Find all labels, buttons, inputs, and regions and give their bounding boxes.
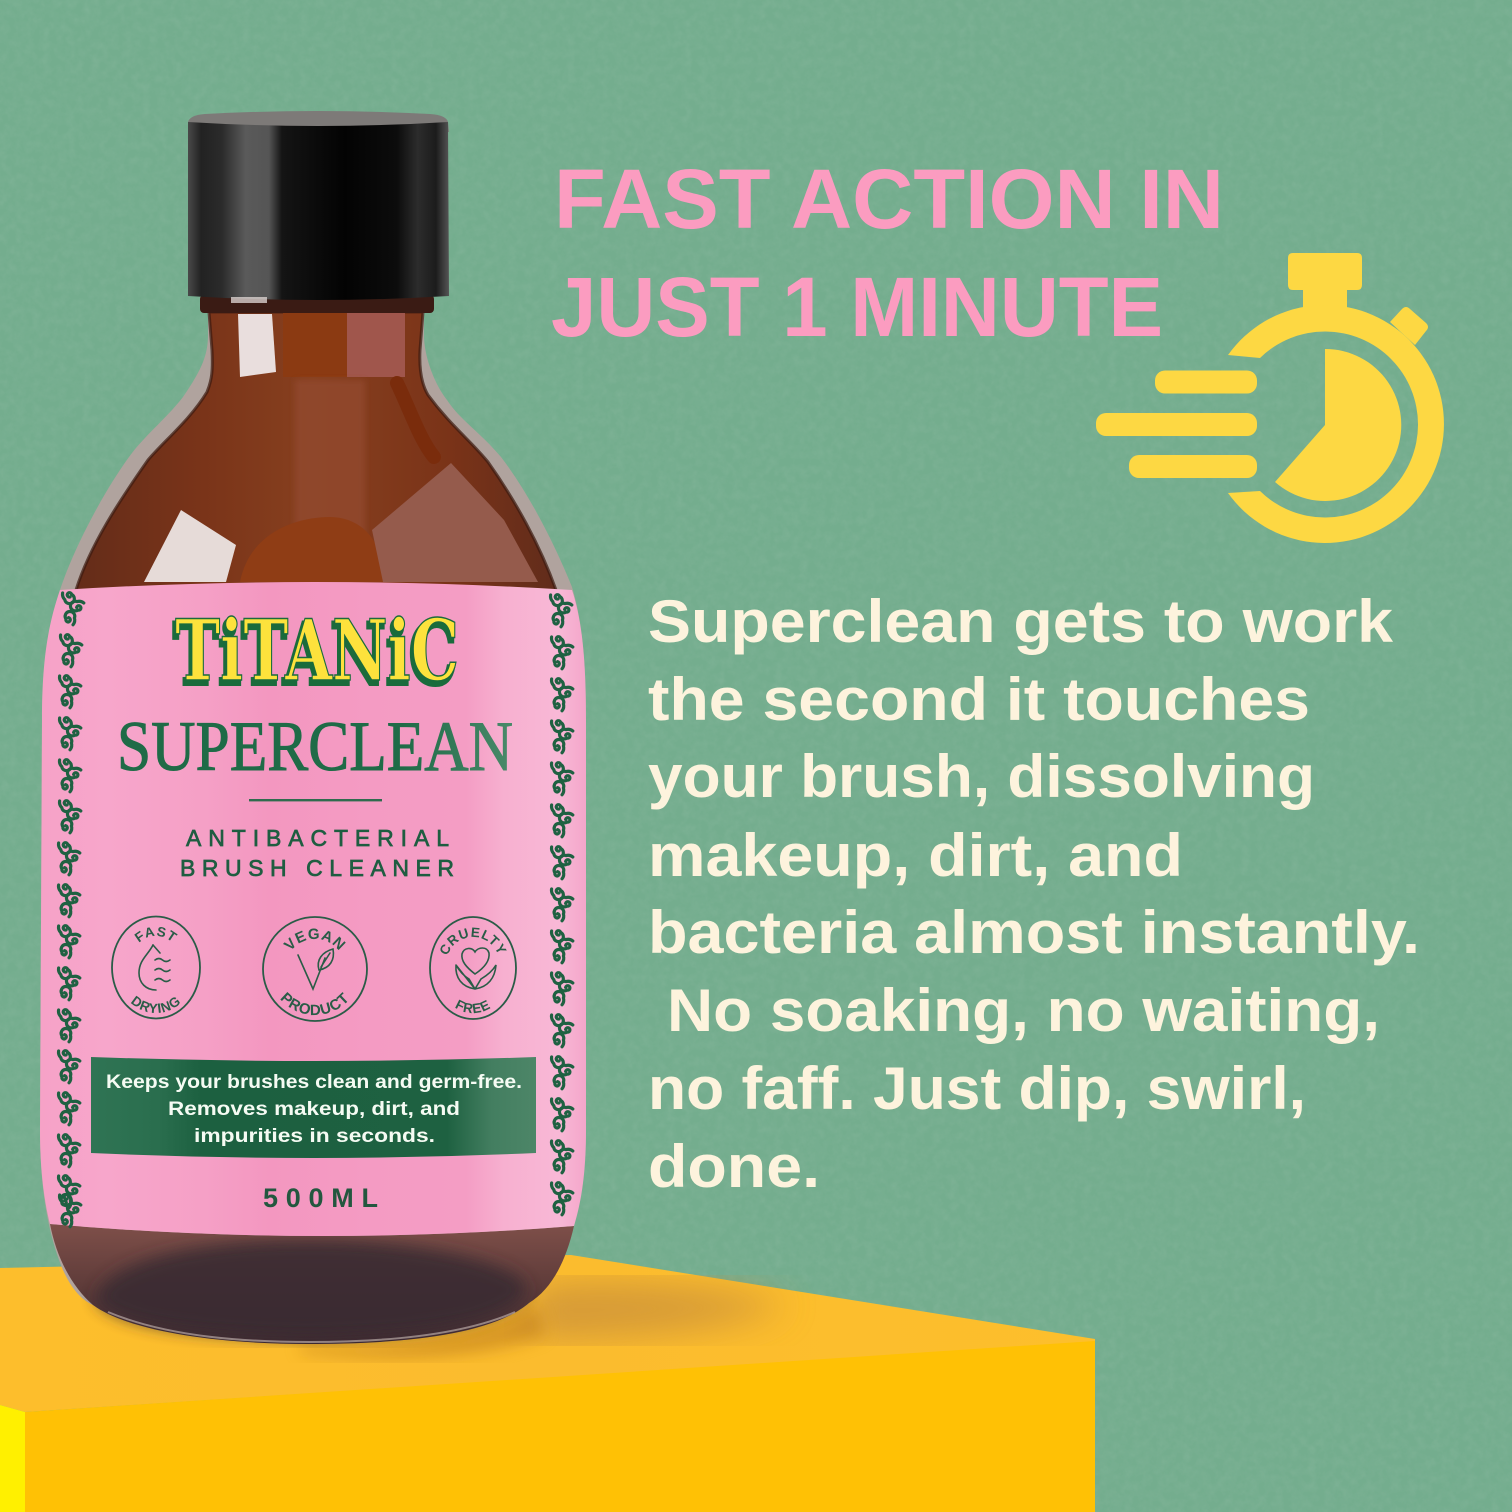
neck right highlight (347, 313, 405, 377)
badge: vegan product: PRODUCT (280, 992, 348, 1016)
badge: cruelty free (429, 916, 517, 1020)
stopwatch wedge (1275, 349, 1401, 501)
subtitle (180, 825, 454, 881)
neck amber core (283, 313, 347, 377)
body copy: bacteria almost instantly. (648, 899, 1420, 966)
stopwatch ring (1228, 305, 1444, 543)
body copy: No soaking, no waiting, (667, 977, 1380, 1044)
bottle body (40, 312, 586, 1344)
body copy: your brush, dissolving (648, 743, 1315, 810)
heading: FAST ACTION IN (554, 152, 1224, 246)
left spiral border (59, 593, 84, 1227)
body copy: done. (648, 1133, 820, 1200)
icon: water drop (139, 945, 170, 990)
subtitle: ANTIBACTERIAL (186, 825, 449, 851)
product name: Superclean: SUPERCLEAN (117, 708, 513, 786)
shoulder dark mark (397, 383, 434, 457)
label background (40, 582, 586, 1236)
speed lines (1096, 370, 1257, 478)
badge: vegan product: VEGAN (283, 928, 346, 950)
green claim box: impurities in seconds. (194, 1126, 435, 1147)
divider (249, 799, 382, 801)
badge: vegan product (262, 916, 368, 1022)
badge: fast drying: FAST (134, 927, 178, 942)
glass interior (76, 312, 556, 1225)
volume: 500ml: 500ML (263, 1183, 378, 1213)
logo: Titanic: TiTANiC (173, 605, 457, 704)
badge: fast drying: DRYING (130, 996, 180, 1013)
center glow (295, 380, 365, 580)
body copy: no faff. Just dip, swirl, (648, 1055, 1306, 1122)
badge: cruelty free: CRUELTY (440, 928, 507, 954)
product label (40, 582, 586, 1236)
subtitle: BRUSH CLEANER (180, 855, 454, 881)
heading: JUST 1 MINUTE (551, 260, 1163, 354)
amber glass bottle (40, 312, 586, 1344)
dark liquid at base (96, 1240, 526, 1338)
green claim box: Removes makeup, dirt, and (168, 1099, 460, 1120)
icon: fast stopwatch (1096, 253, 1444, 543)
body copy: Superclean gets to work (648, 588, 1394, 655)
right pink reflection (372, 463, 538, 582)
badge: cruelty free: FREE (455, 1000, 490, 1014)
green claim box: Keeps your brushes clean and germ-free. (106, 1072, 522, 1093)
icon: heart in hands (456, 948, 496, 989)
cap neck collar (200, 295, 434, 313)
badge: fast drying (111, 916, 201, 1020)
base rim highlight (108, 1312, 515, 1342)
green claim box (91, 1057, 536, 1158)
right spiral border (551, 595, 573, 1215)
cap collar highlight (231, 297, 267, 303)
icon: v leaf (298, 949, 333, 989)
body copy (648, 588, 1420, 1200)
cap top rim (188, 111, 449, 132)
neck reflection (238, 314, 276, 377)
body copy: makeup, dirt, and (648, 822, 1183, 889)
cap body (188, 122, 449, 300)
bottle base (50, 1224, 574, 1344)
yellow pedestal (0, 1255, 1095, 1512)
body copy: the second it touches (648, 666, 1310, 733)
logo: Titanic: TiTANiC (175, 601, 459, 700)
stopwatch crown (1288, 253, 1362, 312)
lower orange glow (240, 517, 383, 582)
white reflection (144, 510, 236, 582)
bottle cap (188, 111, 449, 313)
stopwatch side button (1390, 307, 1428, 345)
heading (551, 152, 1224, 354)
